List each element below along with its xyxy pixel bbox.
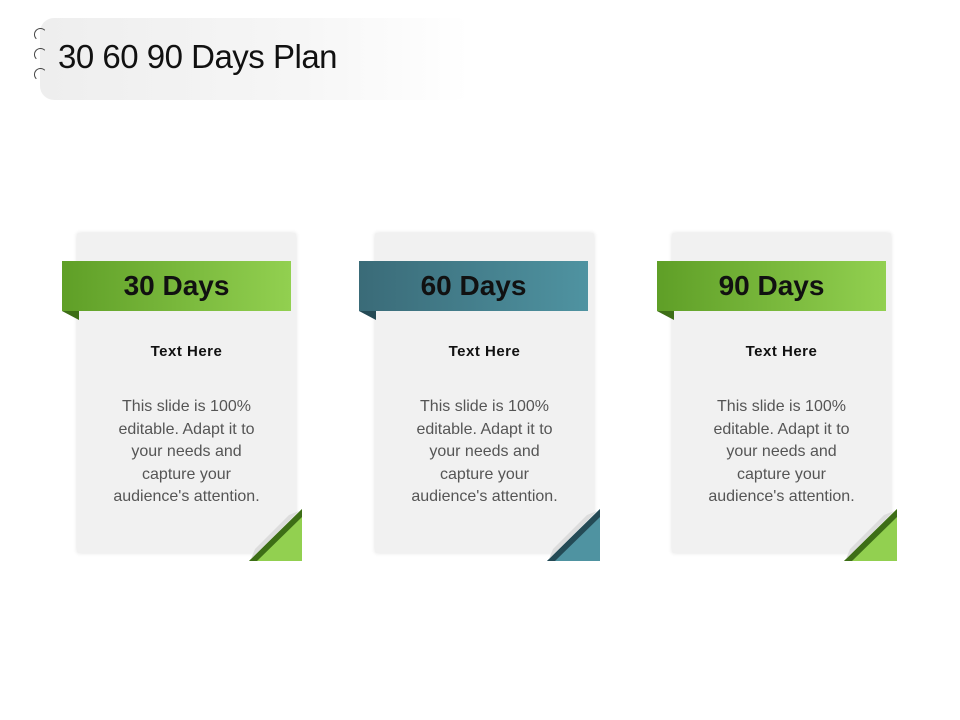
text: Text Here: [449, 343, 520, 360]
text: This slide is 100%: [122, 398, 251, 415]
text: This slide is 100%: [717, 398, 846, 415]
text: audience's attention.: [411, 488, 558, 505]
text: your needs and: [131, 443, 242, 460]
title: 30 60 90 Days Plan: [58, 38, 337, 75]
text: editable. Adapt it to: [416, 420, 553, 438]
text: 30 Days: [124, 270, 229, 301]
text: Text Here: [746, 343, 817, 360]
text: 60 Days: [421, 270, 526, 301]
panel: 30 days: [62, 232, 302, 561]
title bar: [40, 18, 470, 100]
text: Text Here: [151, 343, 222, 360]
text: editable. Adapt it to: [713, 420, 850, 438]
text: capture your: [440, 466, 529, 482]
text: capture your: [737, 466, 826, 482]
text: audience's attention.: [708, 488, 855, 505]
text: your needs and: [726, 443, 837, 460]
text: This slide is 100%: [420, 398, 549, 415]
panel: 90 days: [657, 232, 897, 561]
text: your needs and: [429, 443, 540, 460]
text: audience's attention.: [113, 488, 260, 505]
text: capture your: [142, 466, 231, 482]
text: 90 Days: [719, 270, 824, 301]
icon: rings: [34, 28, 46, 80]
panel: 60 days: [359, 232, 600, 561]
text: editable. Adapt it to: [118, 420, 255, 438]
